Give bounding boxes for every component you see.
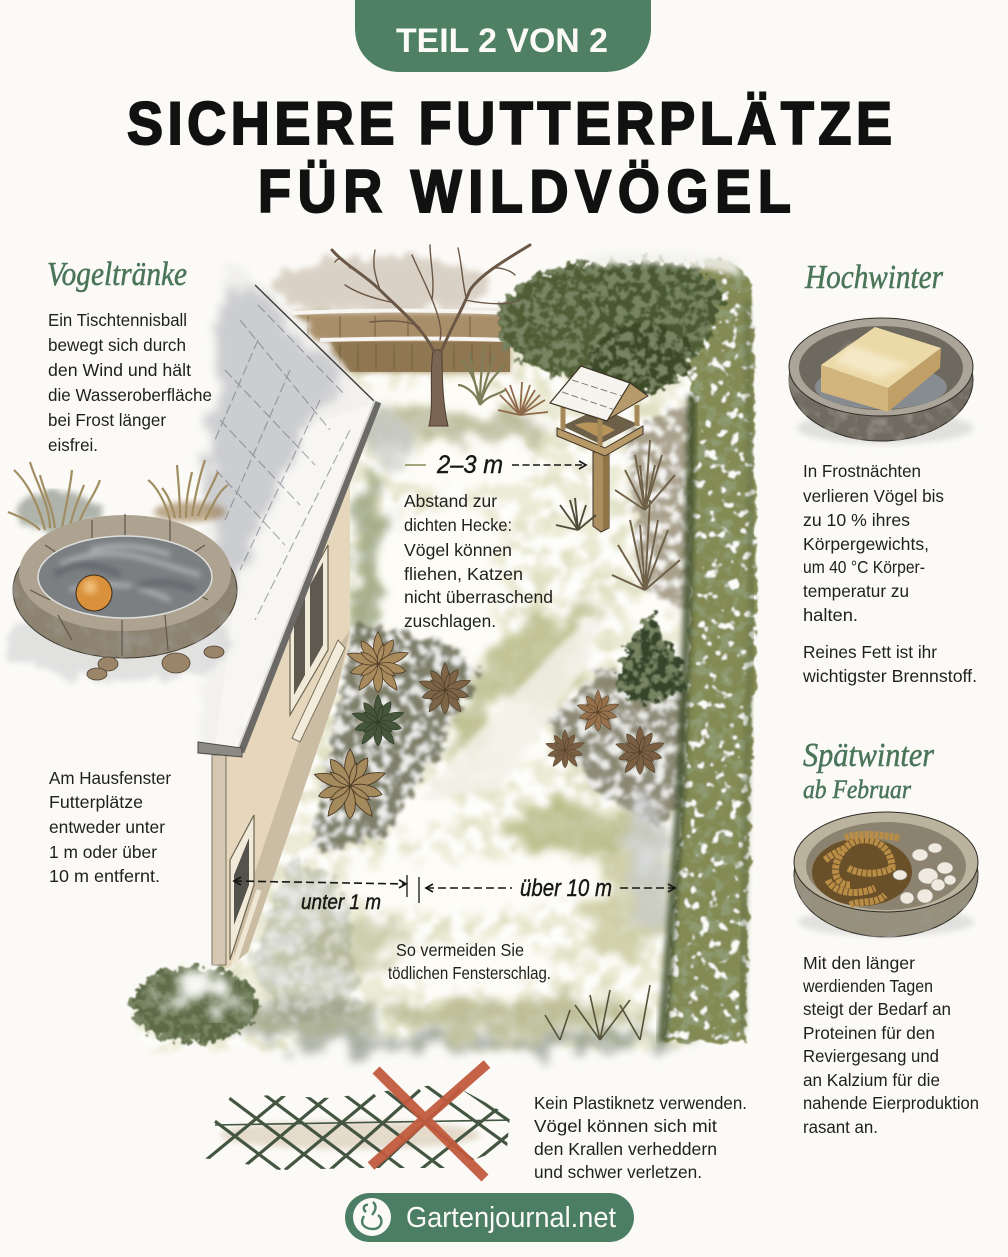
- text block: halten.: [803, 605, 858, 625]
- lower window: [230, 815, 254, 960]
- text: Hausfenster: [49, 768, 171, 886]
- badge: Teil 2 von 2: [355, 0, 651, 72]
- text block: Körpergewichts,: [803, 534, 929, 554]
- heading: ab Februar: [803, 775, 912, 804]
- panel: Spätwinter: [794, 737, 979, 1137]
- text block: bewegt sich durch: [48, 335, 186, 355]
- text: Abstand zur Hecke: [404, 491, 553, 631]
- garden path: [420, 610, 600, 800]
- text block: steigt der Bedarf an: [803, 999, 951, 1019]
- text block: an Kalzium für die: [803, 1070, 940, 1090]
- feeder roof: [550, 366, 630, 421]
- measure: unter 1 m: [234, 875, 419, 914]
- text block: die Wasseroberfläche: [48, 385, 212, 405]
- text: Abstand zur Hecke: fliehen, Katzen: [404, 564, 523, 584]
- text: Abstand zur Hecke: nicht überraschend: [404, 587, 553, 607]
- text block: zu 10 % ihres: [803, 510, 910, 530]
- icon: bowl with mealworms and calcium: [794, 812, 978, 937]
- text block: [48, 310, 212, 455]
- text block: den Wind und hält: [48, 360, 191, 380]
- grey snow shadow: [363, 414, 666, 930]
- title: FÜR WILDVÖGEL: [258, 158, 791, 226]
- text: Hausfenster: entweder unter: [49, 817, 165, 837]
- heading: Vogeltränke: [47, 256, 187, 293]
- text block: [802, 953, 979, 1137]
- feeder tray: [557, 426, 643, 456]
- roof: [198, 255, 378, 757]
- upper window: [290, 545, 328, 715]
- text block: werdienden Tagen: [802, 976, 933, 996]
- text: Abstand zur Hecke: dichten Hecke:: [404, 515, 512, 535]
- panel: Hochwinter: [789, 259, 977, 686]
- text: Fensterschlag: So vermeiden Sie: [396, 940, 524, 960]
- path-side flower beds: [250, 625, 685, 1025]
- text: Hausfenster: Am Hausfenster: [49, 768, 171, 788]
- text block: Reines Fett ist ihr: [803, 642, 937, 662]
- text: Hausfenster: Futterplätze: [49, 792, 143, 812]
- measure: über 10 m: über 10 m: [520, 875, 612, 902]
- text block: den Krallen verheddern: [534, 1139, 717, 1159]
- garden illustration: [131, 245, 757, 1050]
- logo badge: Gartenjournal.net: [345, 1193, 634, 1242]
- icon: bowl with fat block: [789, 318, 973, 444]
- right side bed: [625, 400, 690, 610]
- text block: wichtigster Brennstoff.: [802, 666, 977, 686]
- bed plants by the wall: [313, 632, 665, 819]
- ground: [140, 340, 700, 1050]
- text: Hausfenster: 10 m entfernt.: [49, 866, 160, 886]
- evergreen shrub: [497, 260, 722, 392]
- text block: Mit den länger: [803, 953, 915, 973]
- icon: crossed-out plastic net: [200, 1064, 520, 1178]
- heading: [803, 737, 935, 804]
- text block: [802, 461, 977, 686]
- text block: bei Frost länger: [48, 410, 166, 430]
- text block: temperatur zu: [803, 581, 909, 601]
- red cross: [371, 1064, 487, 1178]
- bird feeder: [550, 366, 648, 532]
- text: Abstand zur Hecke: Abstand zur: [404, 491, 497, 511]
- title: SICHERE FUTTERPLÄTZE: [127, 90, 892, 158]
- text block: Kein Plastiknetz verwenden.: [534, 1093, 747, 1113]
- feeder gable: [607, 383, 648, 420]
- text block: rasant an.: [803, 1117, 878, 1137]
- measure: 2–3 m: 2–3 m: [436, 451, 503, 479]
- bare tree: [332, 245, 530, 426]
- text: Abstand zur Hecke: Vögel können: [404, 540, 512, 560]
- text: Fensterschlag: tödlichen Fensterschlag.: [388, 963, 551, 983]
- measure: unter 1 m: unter 1 m: [301, 891, 381, 914]
- text block: [534, 1093, 747, 1182]
- panel: Vogeltränke: [5, 256, 237, 681]
- icon: bird bath with floating ball: [5, 460, 237, 681]
- small conifer: [614, 612, 688, 702]
- heading: Hochwinter: [804, 259, 944, 296]
- logo badge: Gartenjournal.net: Gartenjournal.net: [406, 1202, 616, 1234]
- house wall: [212, 480, 350, 968]
- text block: und schwer verletzen.: [534, 1162, 702, 1182]
- badge: Teil 2 von 2: TEIL 2 VON 2: [396, 22, 608, 60]
- text block: eisfrei.: [48, 435, 98, 455]
- text block: Vögel können sich mit: [534, 1116, 717, 1136]
- text: Abstand zur Hecke: zuschlagen.: [404, 611, 496, 631]
- plants beside the feeder: [556, 440, 680, 590]
- fence: [292, 310, 510, 372]
- text block: nahende Eierproduktion: [803, 1093, 979, 1113]
- feeder post: [593, 452, 609, 532]
- heading: Spätwinter: [803, 737, 935, 774]
- bottom-edge stems: [545, 985, 650, 1040]
- dry shrub by the fence: [498, 382, 548, 415]
- text block: verlieren Vögel bis: [803, 486, 944, 506]
- text: Hausfenster: 1 m oder über: [49, 842, 157, 862]
- snowy bush: [131, 967, 259, 1043]
- ping-pong ball: [76, 575, 112, 611]
- title: [127, 90, 892, 226]
- panel: Plastiknetz warning: [200, 1064, 747, 1182]
- hedge: [662, 260, 757, 1042]
- text block: Ein Tischtennisball: [48, 310, 187, 330]
- distant wash behind fence: [270, 257, 490, 313]
- snow on shrub top: [580, 251, 740, 276]
- text block: Proteinen für den: [803, 1023, 935, 1043]
- text block: Reviergesang und: [803, 1046, 939, 1066]
- text block: In Frostnächten: [803, 461, 921, 481]
- feeder posts: [563, 405, 637, 446]
- ornamental grass by the fence: [458, 345, 505, 405]
- text: Fensterschlag: [388, 940, 551, 983]
- text block: um 40 °C Körper-: [803, 557, 925, 577]
